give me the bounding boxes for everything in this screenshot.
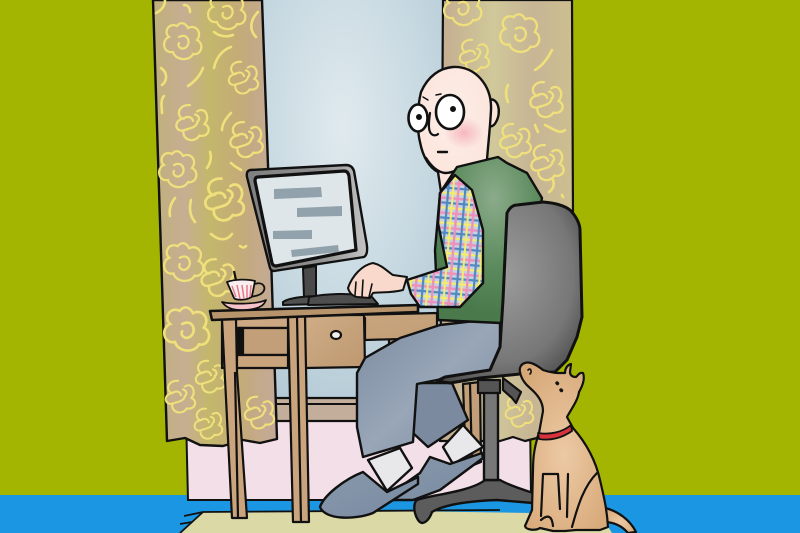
desk apron [222, 313, 437, 368]
desk [210, 305, 481, 522]
hand [348, 263, 407, 298]
blue floor [0, 495, 800, 533]
dog muzzle line [528, 369, 531, 374]
eyebrows [423, 94, 441, 100]
near leg and thigh [357, 318, 500, 457]
computer monitor [247, 165, 367, 305]
middle leg [288, 316, 309, 522]
screen text bars [273, 187, 342, 257]
office chair [414, 202, 582, 523]
cheek blush [444, 117, 484, 149]
dog eyes [557, 383, 562, 390]
rug [180, 510, 612, 533]
left curtain [153, 0, 277, 446]
desk rear legs [389, 316, 481, 468]
plaid sleeve [407, 175, 483, 307]
right curtain [440, 0, 573, 441]
chair lever [503, 378, 521, 403]
lower rail [237, 355, 288, 368]
right eye [436, 95, 464, 129]
cup stripes [232, 285, 251, 299]
dog legs [541, 473, 597, 527]
man [320, 67, 542, 518]
sweater vest [435, 157, 542, 323]
window sill [272, 398, 500, 421]
head and neck [418, 67, 491, 192]
chair base [414, 480, 533, 523]
monitor frame [247, 165, 367, 271]
dog [520, 363, 636, 533]
nose [429, 113, 438, 135]
chair column [484, 392, 498, 480]
chin [426, 158, 457, 173]
mouth [438, 151, 447, 153]
far leg [413, 383, 468, 447]
dog body and head [520, 363, 608, 531]
near sock [368, 448, 412, 491]
drawer knob [331, 331, 341, 339]
teacup and saucer [222, 271, 266, 310]
saucer [222, 300, 266, 310]
window glass [258, 0, 446, 400]
far sock [443, 425, 483, 464]
keyboard [308, 294, 378, 305]
dog collar [538, 425, 572, 440]
teaspoon [234, 271, 236, 280]
drawer [305, 315, 365, 368]
drawer shadow [238, 328, 243, 355]
desk top [210, 305, 418, 320]
pink wall below window [186, 416, 531, 500]
left leg [222, 319, 247, 518]
cup handle [251, 283, 264, 297]
cup [227, 280, 255, 300]
chair back and seat [437, 202, 582, 383]
monitor neck and base [283, 266, 322, 305]
dog tail [604, 508, 636, 533]
near slipper [320, 472, 418, 518]
drawer recess [238, 328, 288, 355]
monitor screen [255, 171, 356, 266]
chair collar [478, 380, 500, 393]
far slipper [393, 453, 483, 500]
ear [487, 99, 499, 126]
left eye [408, 104, 428, 132]
